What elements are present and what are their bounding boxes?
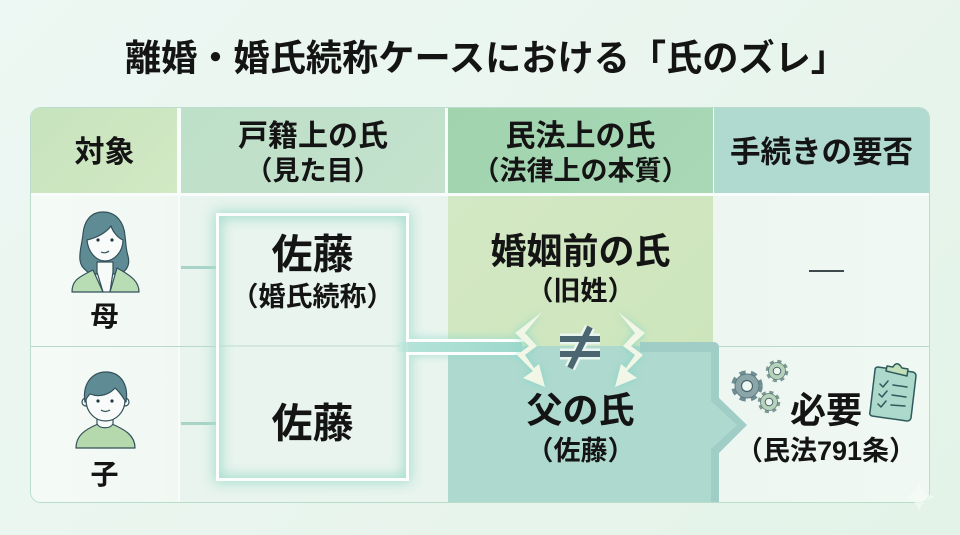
register note mother: （婚氏続称） xyxy=(232,282,394,312)
label: child: 子 xyxy=(90,459,118,490)
conflict arrow left xyxy=(515,312,545,387)
connector mother xyxy=(181,266,217,269)
teal father cell with chevron xyxy=(448,342,747,502)
header text: legal surname: 民法上の氏 xyxy=(506,120,656,153)
register surname mother: 佐藤 xyxy=(272,231,354,277)
procedure required: 必要 xyxy=(790,389,862,430)
mother civil-law cell xyxy=(448,196,713,346)
legal surname child: 父の氏 xyxy=(526,389,634,430)
procedure mother dash xyxy=(809,270,844,272)
sparkle watermark xyxy=(904,481,935,512)
header text: register surname xyxy=(238,120,388,186)
procedure legal article: （民法791条） xyxy=(736,436,916,466)
icon: large gear xyxy=(734,372,760,400)
icon: child xyxy=(76,372,135,448)
legal surname mother: 婚姻前の氏 xyxy=(490,230,670,271)
header text: procedure needed: 手続きの要否 xyxy=(730,136,913,170)
header: target xyxy=(31,108,177,193)
row line across box xyxy=(219,345,400,347)
label: mother: 母 xyxy=(90,301,118,332)
header text: legal surname xyxy=(472,120,688,186)
conflict arrow right xyxy=(615,312,645,387)
header text: register surname: （見た目） xyxy=(246,156,380,186)
connector from box to not-equal xyxy=(396,335,524,358)
header: civil law xyxy=(448,108,713,193)
connector child xyxy=(181,422,217,425)
row cell backgrounds xyxy=(31,196,929,502)
legal note child: （佐藤） xyxy=(526,436,634,466)
header: family register xyxy=(181,108,445,193)
legal note mother: （旧姓） xyxy=(526,276,634,306)
row divider xyxy=(31,346,929,347)
header text: legal surname: （法律上の本質） xyxy=(472,156,688,186)
icon: clipboard xyxy=(870,364,916,421)
icon: mother xyxy=(72,212,139,292)
icon: small gear bottom xyxy=(760,392,778,412)
register surname child: 佐藤 xyxy=(272,400,354,446)
table panel xyxy=(31,108,929,502)
header text: target: 対象 xyxy=(74,136,134,169)
icon: small gear top xyxy=(768,362,786,380)
header text: register surname: 戸籍上の氏 xyxy=(238,120,388,153)
highlighted surname box xyxy=(216,213,409,481)
title: 離婚・婚氏続称ケースにおける「氏のズレ」 xyxy=(125,37,847,78)
not-equal sign xyxy=(560,327,600,368)
header: procedure xyxy=(714,108,929,193)
